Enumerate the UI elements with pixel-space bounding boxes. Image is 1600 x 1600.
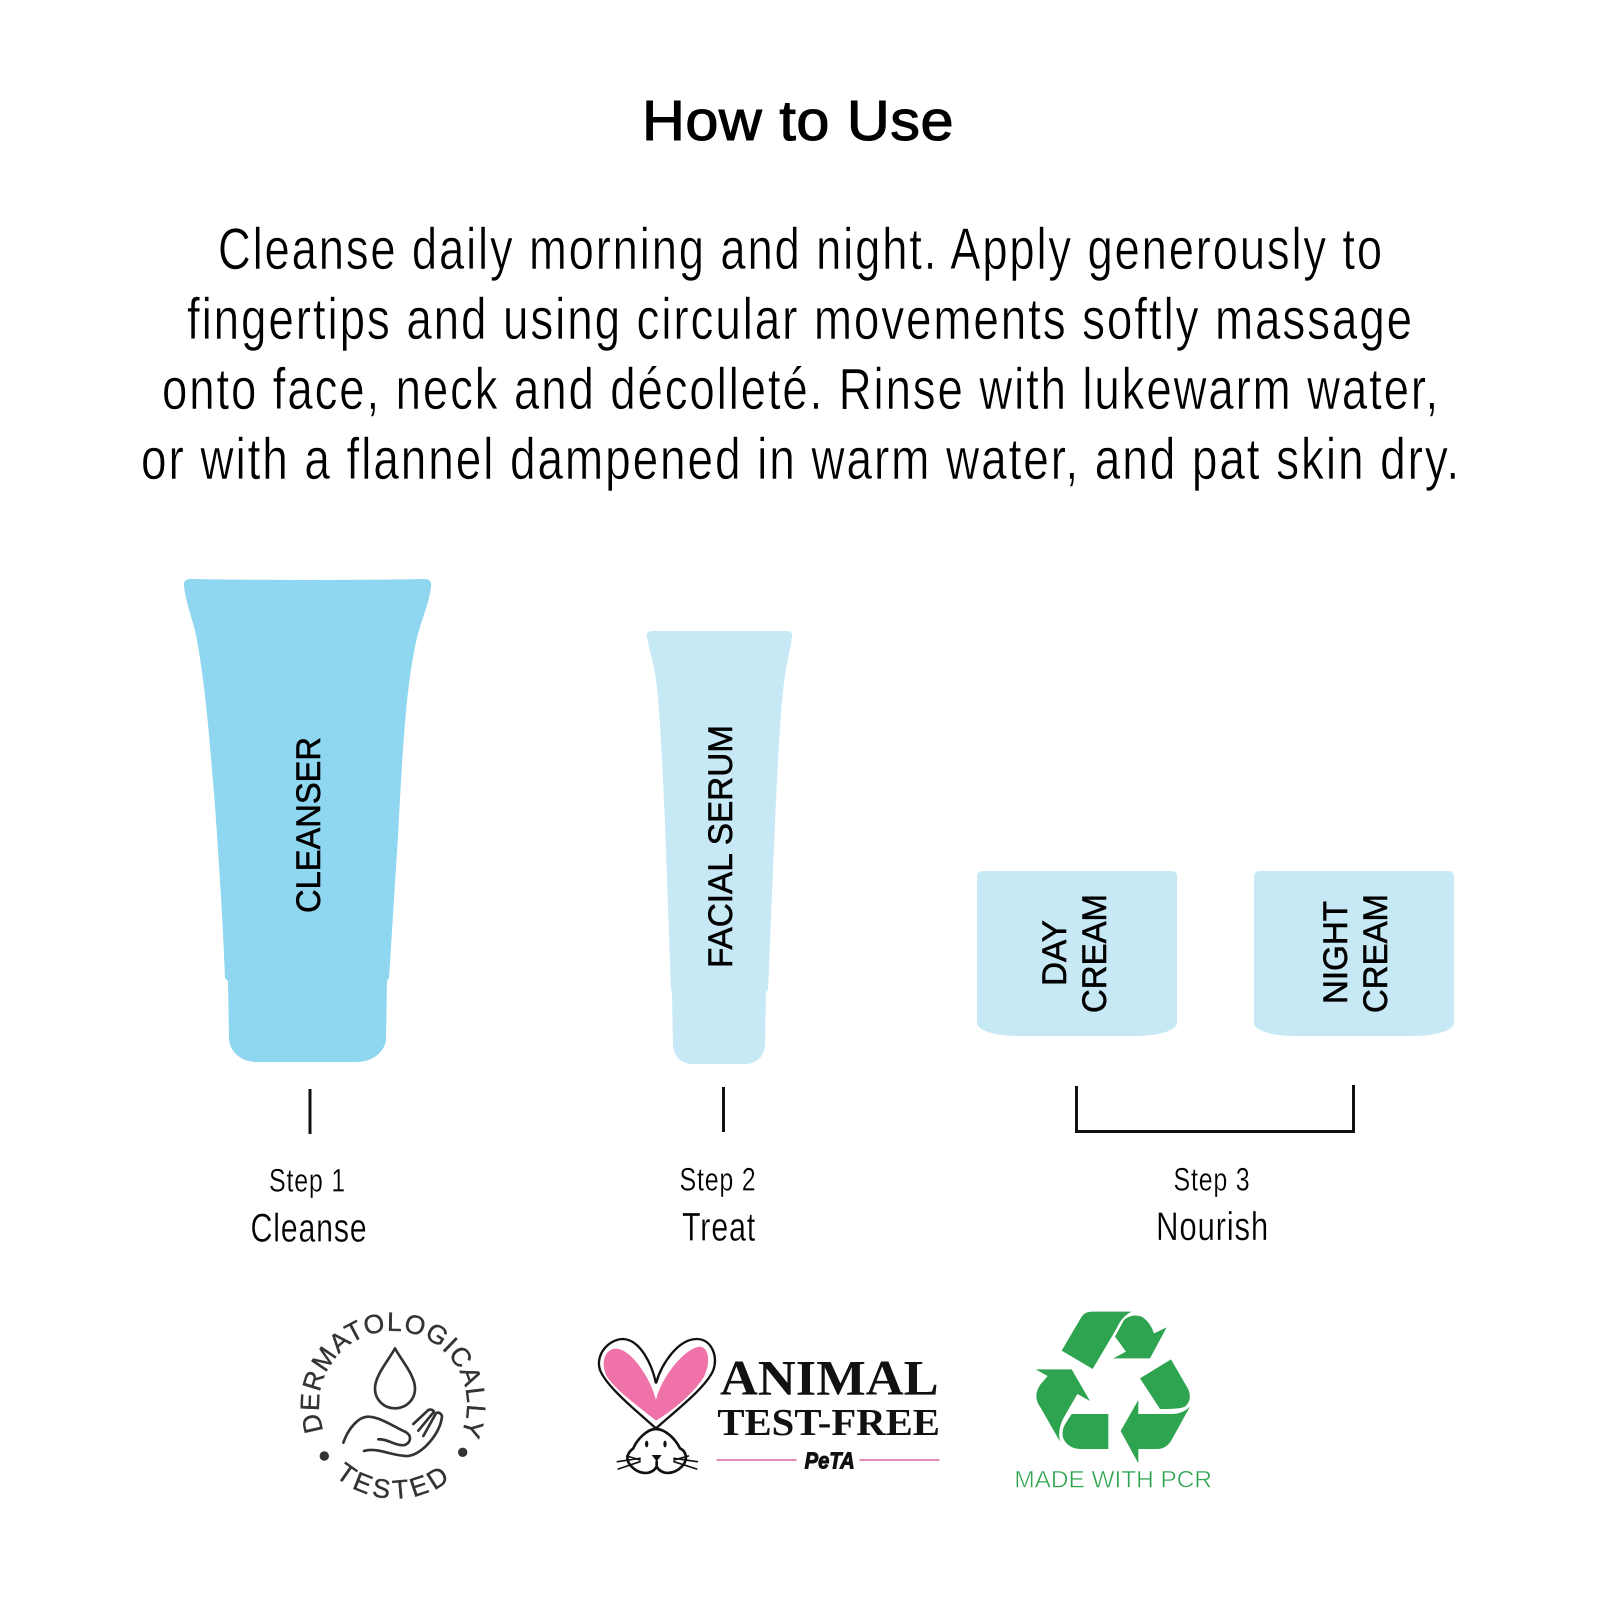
step 2: facial serum tube — [647, 631, 792, 1064]
step 2 caption: Step 2 — [680, 1162, 756, 1198]
peta mark with lines: PeTA — [805, 1447, 855, 1473]
step 3: night cream jar: CREAM — [1357, 894, 1395, 1013]
instructions text block — [141, 217, 1461, 492]
step 1 caption — [250, 1162, 368, 1250]
icon: recycling arrows — [1036, 1312, 1190, 1463]
badge: dermatologically tested — [300, 1312, 486, 1499]
step 2: facial serum tube: FACIAL SERUM — [702, 725, 740, 968]
made with pcr label: MADE WITH PCR — [1014, 1467, 1212, 1494]
badge: animal test-free peta — [599, 1339, 940, 1473]
icon: bunny ears heart — [599, 1339, 715, 1428]
step 3 bracket — [1076, 1085, 1354, 1132]
step 1: cleanser tube — [184, 579, 431, 1062]
step 1 tick line — [308, 1089, 312, 1134]
step 2 caption: Treat — [682, 1206, 756, 1250]
step 1 caption: Cleanse — [250, 1206, 368, 1250]
badge: dermatologically tested: TESTED — [340, 1462, 446, 1499]
icon: pink inner ears — [604, 1347, 708, 1421]
step 3: day cream jar — [977, 871, 1177, 1036]
step 1: cleanser tube: CLEANSER — [290, 737, 328, 913]
badge: made with pcr recycling — [1014, 1312, 1212, 1494]
step 3 caption — [1156, 1162, 1269, 1249]
step 2 caption — [680, 1162, 756, 1250]
badge: dermatologically tested: DERMATOLOGICALLY — [300, 1312, 486, 1440]
step 3: night cream jar — [1254, 871, 1454, 1036]
step 2 tick line — [722, 1087, 725, 1132]
step 3 caption: Nourish — [1156, 1205, 1269, 1249]
step 3: night cream jar: NIGHT — [1317, 901, 1355, 1004]
step 3 caption: Step 3 — [1174, 1162, 1250, 1198]
icon: water drop on hand — [343, 1348, 442, 1456]
step 3: day cream jar: DAY — [1036, 920, 1074, 986]
badge: animal test-free peta: TEST-FREE — [717, 1402, 940, 1444]
title: How to Use — [642, 89, 954, 153]
step 3: day cream jar: CREAM — [1076, 894, 1114, 1013]
icon: bunny face — [617, 1429, 697, 1473]
wordmark: animal test-free: ANIMAL — [720, 1350, 939, 1406]
step 1 caption: Step 1 — [269, 1162, 346, 1198]
